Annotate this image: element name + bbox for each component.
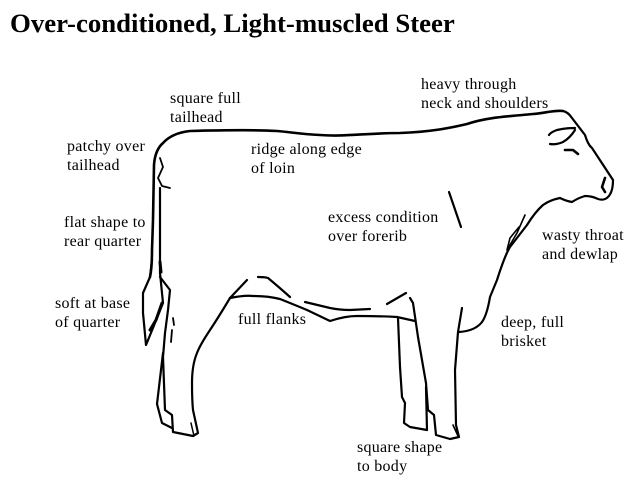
- label: wasty throat and dewlap: wasty throat: [542, 227, 624, 244]
- front far leg: [398, 318, 427, 430]
- label: soft at base of quarter: soft at base: [55, 295, 130, 312]
- label: ridge along edge of loin: of loin: [251, 160, 295, 177]
- label: flat shape to rear quarter: flat shape to: [64, 214, 146, 231]
- forerib mark: [449, 192, 461, 227]
- label: flat shape to rear quarter: rear quarter: [64, 233, 141, 250]
- hock mark: [171, 318, 174, 342]
- label: soft at base of quarter: [55, 295, 130, 331]
- label: square shape to body: to body: [357, 458, 407, 475]
- label: patchy over tailhead: tailhead: [67, 157, 120, 174]
- nostril: [602, 178, 605, 192]
- label: flat shape to rear quarter: [64, 214, 146, 250]
- belly line: [230, 296, 415, 321]
- hind far leg: [157, 353, 172, 428]
- hoof mark rear: [191, 423, 194, 436]
- label: excess condition over forerib: excess condition: [328, 209, 439, 226]
- label: full flanks: full flanks: [238, 311, 306, 328]
- label: patchy over tailhead: [67, 138, 145, 174]
- label: deep, full brisket: deep, full: [501, 314, 564, 331]
- label: square shape to body: [357, 439, 442, 475]
- hind near leg: [160, 277, 230, 436]
- hoof mark: [453, 425, 458, 436]
- label: heavy through neck and shoulders: neck and shoulders: [421, 95, 548, 112]
- label: excess condition over forerib: over forerib: [328, 228, 407, 245]
- label: deep, full brisket: [501, 314, 564, 350]
- label: excess condition over forerib: [328, 209, 439, 245]
- ear: [549, 128, 575, 144]
- head and throat: [459, 111, 613, 332]
- label: heavy through neck and shoulders: [421, 76, 548, 112]
- label: square full tailhead: tailhead: [170, 109, 223, 126]
- eye: [565, 150, 578, 154]
- title: Over-conditioned, Light-muscled Steer: [10, 8, 455, 38]
- label: wasty throat and dewlap: [542, 227, 624, 263]
- dewlap: [507, 215, 525, 250]
- hook at tailhead: [158, 158, 170, 188]
- label: heavy through neck and shoulders: heavy through: [421, 76, 516, 93]
- label: square shape to body: square shape: [357, 439, 442, 456]
- label: ridge along edge of loin: ridge along edge: [251, 141, 362, 158]
- label: square full tailhead: [170, 90, 241, 126]
- label: ridge along edge of loin: [251, 141, 362, 177]
- label: patchy over tailhead: patchy over: [67, 138, 145, 155]
- label: wasty throat and dewlap: and dewlap: [542, 246, 618, 263]
- label: deep, full brisket: brisket: [501, 333, 546, 350]
- flank lines: [230, 277, 406, 310]
- front near leg: [410, 298, 462, 439]
- label: square full tailhead: square full: [170, 90, 241, 107]
- back and rump line: [150, 111, 563, 277]
- tail: [143, 188, 163, 345]
- label: soft at base of quarter: of quarter: [55, 314, 120, 331]
